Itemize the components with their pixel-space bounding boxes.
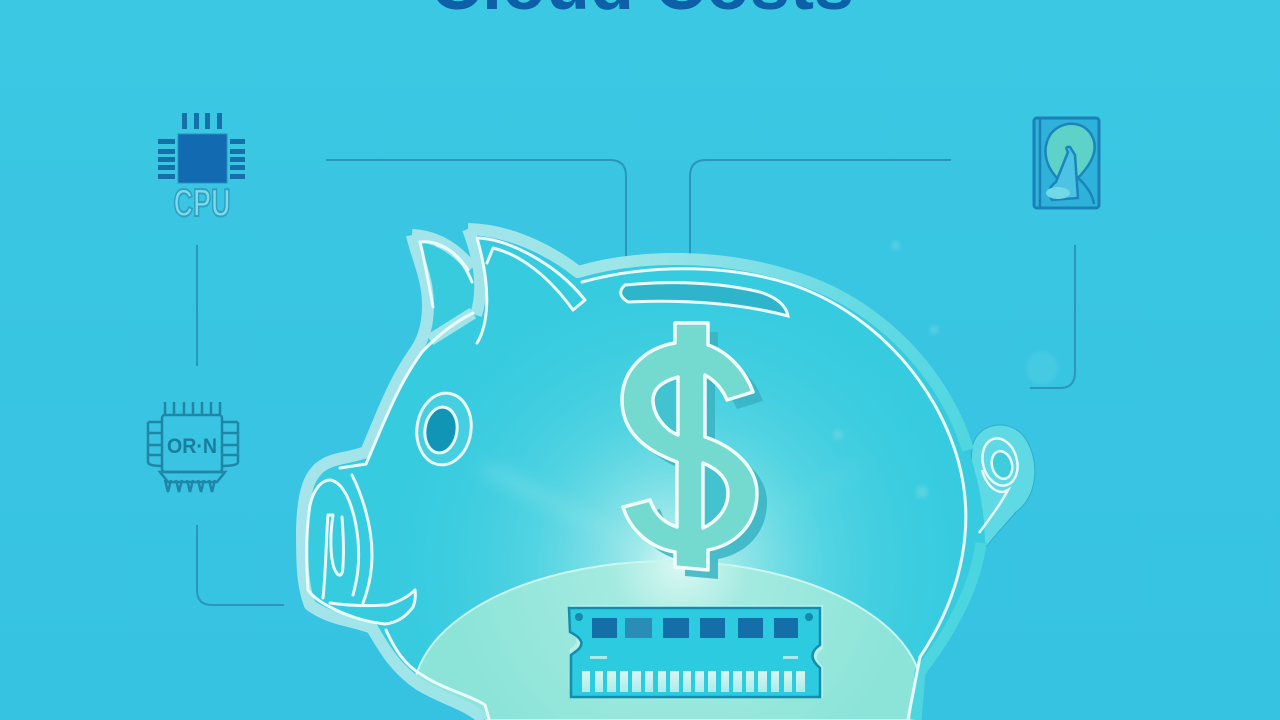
pig body: [300, 229, 1023, 720]
RAM chips: [592, 618, 798, 638]
interior glow: [416, 350, 917, 720]
icon: CPU chip: [158, 113, 245, 225]
snout: [307, 475, 415, 624]
infographic canvas: [146, 0, 1100, 720]
glowing floor: [413, 561, 923, 720]
tail blob: [968, 425, 1035, 546]
pig halo outline: [302, 229, 981, 720]
ear: back: [412, 236, 478, 342]
RAM module: [569, 605, 823, 698]
coin slot: [621, 283, 788, 316]
tail: [977, 434, 1023, 533]
floating particles: [833, 241, 1058, 498]
icon: outline processor chip: [148, 402, 238, 492]
white body outline: [307, 238, 966, 719]
RAM contacts: [582, 671, 805, 692]
dollar sign: [622, 323, 767, 579]
connector lines: [197, 160, 1075, 605]
eye: [412, 390, 476, 468]
chip label: OR·N: [167, 435, 217, 458]
CPU label: CPU: [174, 182, 230, 225]
icon: hard drive: [1034, 118, 1099, 208]
